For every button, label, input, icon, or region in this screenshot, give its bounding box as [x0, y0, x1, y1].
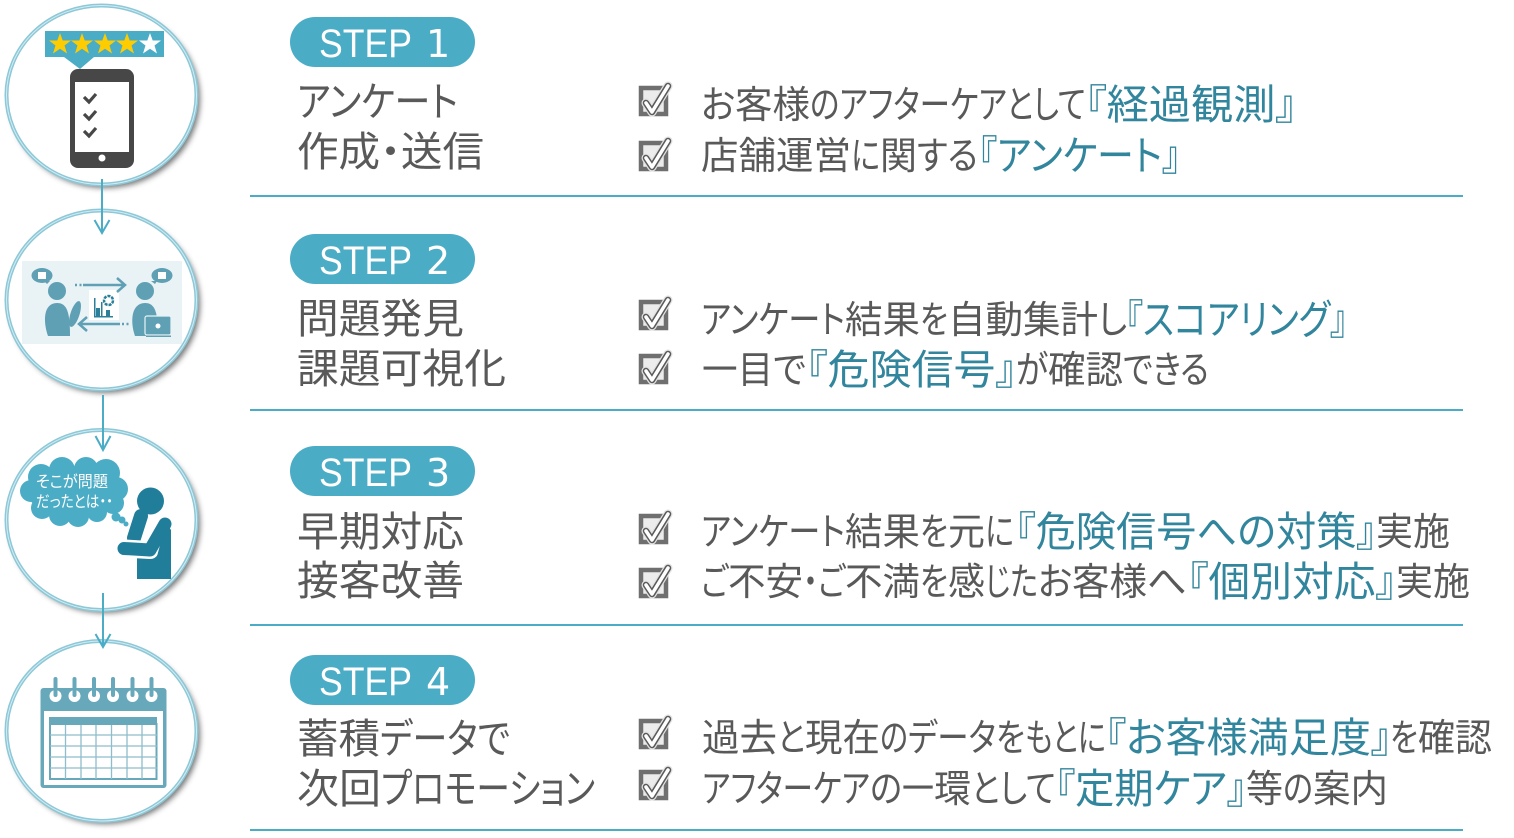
step 2 checklist: 確認	[1048, 350, 1123, 392]
step 2 heading: 課題可視化	[297, 346, 506, 392]
step 4 checklist: 等	[1246, 769, 1283, 811]
step 4 checklist: 環	[934, 769, 971, 811]
step 3 badge	[290, 446, 475, 496]
step 4 heading	[297, 716, 595, 812]
step 2 checklist: アンケート	[701, 300, 845, 342]
step 4 heading: データで	[380, 716, 510, 762]
step 3 heading: 早期対応	[297, 509, 464, 555]
step 3 heading	[297, 509, 464, 604]
step 3 checklist: へ	[1147, 562, 1187, 604]
thinking person figure	[124, 488, 171, 579]
step 1 checklist: する	[917, 136, 978, 178]
step 4 badge: STEP	[319, 660, 412, 704]
step 3 checklist: 結果	[845, 512, 920, 554]
step 3 checklist: 客様	[1072, 562, 1147, 604]
step 4 checklist: の	[870, 769, 902, 811]
step 4 badge	[290, 655, 475, 705]
step 4 checklist: 一	[902, 769, 934, 811]
divider 4	[250, 829, 1463, 831]
step 2 checklist: を	[920, 300, 948, 342]
step 1 circle: phone survey icon	[6, 6, 200, 188]
step 3 checklist: 感	[948, 562, 985, 604]
step 3 checklist: 『危険信号への対策』	[1016, 509, 1376, 555]
step 4 checklist: アフターケア	[702, 769, 870, 811]
step 3 heading: 接客改善	[297, 558, 464, 604]
step 2 checklist: 自動集計	[948, 300, 1098, 342]
arrow: step 3 to step 4	[96, 593, 110, 647]
step 4 checklist: の	[1283, 769, 1313, 811]
arrow: step 2 to step 3	[96, 395, 110, 450]
step 1 badge	[290, 17, 475, 67]
step 1 badge: 1	[426, 22, 450, 66]
step 1 heading: アンケート	[297, 79, 458, 125]
step 4 checklist: データを	[908, 718, 1025, 760]
step 3 checklist: 元	[948, 512, 985, 554]
step 1 heading: 作成・送信	[297, 129, 484, 175]
step 4 checklist: 『定期ケア』	[1056, 766, 1246, 812]
step 2 checklist	[641, 297, 1348, 393]
step 2 checklist: し	[1098, 300, 1127, 342]
step 4 checklist	[641, 715, 1492, 812]
step 3 checklist: を	[920, 562, 948, 604]
step 4 checklist: 過去	[702, 718, 777, 760]
step 2 heading	[297, 296, 506, 392]
step 3 badge: 3	[426, 451, 450, 495]
step 2 heading: 問題発見	[297, 296, 464, 342]
step 1 checklist: のアフターケアとして	[810, 85, 1086, 127]
step 2 checklist: 結果	[845, 300, 920, 342]
step 1 checklist	[641, 82, 1296, 179]
step 4 heading: プロモーション	[381, 766, 595, 812]
step 4 checklist: として	[971, 769, 1056, 811]
step 1 checklist: お	[701, 85, 735, 127]
thought cloud with text	[20, 457, 128, 527]
step 1 checklist: に	[851, 136, 880, 178]
step 2 checklist: 『スコアリング』	[1126, 297, 1348, 343]
step 4 checklist: の	[880, 718, 908, 760]
step 3 checklist: 実施	[1396, 562, 1470, 604]
step 4 heading: 次回	[297, 766, 381, 812]
step 1 heading	[297, 79, 484, 175]
step 4 checklist: 現在	[805, 718, 880, 760]
thought cloud with text: そこが問題	[36, 473, 108, 491]
step 1 checklist: 店舗運営	[701, 136, 851, 178]
step 4 checklist: を	[1390, 718, 1418, 760]
step 3 checklist: 『個別対応』	[1188, 559, 1396, 605]
step 2 circle: two people sharing results icon	[6, 210, 200, 393]
step 2 checklist: 『危険信号』	[806, 347, 1016, 393]
divider 1	[250, 195, 1463, 197]
step 3 circle: person thinking icon	[6, 430, 200, 613]
step 2 badge: STEP	[319, 239, 412, 283]
step 2 checklist: が	[1016, 350, 1048, 392]
step 1 checklist: 『アンケート』	[978, 133, 1180, 179]
step 4 heading: 蓄積	[297, 716, 380, 762]
icon: star rating banner	[45, 31, 164, 69]
step 3 checklist: に	[985, 512, 1014, 554]
divider 3	[250, 624, 1463, 626]
step 4 badge: 4	[426, 660, 450, 704]
step 3 checklist: を	[920, 512, 948, 554]
step 3 checklist: ・	[803, 562, 818, 604]
step 1 badge: STEP	[319, 22, 412, 66]
step 3 checklist	[641, 509, 1470, 605]
step 4 checklist: 確認	[1418, 718, 1492, 760]
step 1 checklist: 『経過観測』	[1086, 82, 1296, 128]
step 4 checklist: と	[777, 718, 805, 760]
step 3 checklist: 実施	[1376, 512, 1450, 554]
step 3 checklist: 不安	[728, 562, 803, 604]
step 4 checklist: 『お客様満足度』	[1106, 715, 1392, 761]
divider 2	[250, 409, 1463, 411]
step 2 checklist: 一目で	[702, 350, 806, 392]
icon: smartphone with checklist	[70, 69, 134, 168]
step 2 badge: 2	[426, 239, 450, 283]
step 1 checklist: 客様	[735, 85, 810, 127]
step 3 badge: STEP	[319, 451, 412, 495]
arrow: step 1 to step 2	[94, 179, 110, 233]
step 2 badge	[290, 234, 475, 284]
step 3 checklist: お	[1038, 562, 1072, 604]
step 3 checklist: ご	[701, 562, 729, 604]
step 4 checklist: もとに	[1025, 718, 1106, 760]
step 3 checklist: アンケート	[701, 512, 845, 554]
step 4 circle: calendar icon	[6, 641, 200, 824]
step 3 checklist: ご	[818, 562, 846, 604]
thought cloud with text: だったとは・・	[36, 493, 113, 511]
step 3 checklist: 不満	[845, 562, 920, 604]
step 3 checklist: じた	[985, 562, 1038, 604]
step 1 checklist: 関	[880, 136, 917, 178]
step 2 checklist: できる	[1123, 350, 1209, 392]
step 4 checklist: 案内	[1313, 769, 1388, 811]
